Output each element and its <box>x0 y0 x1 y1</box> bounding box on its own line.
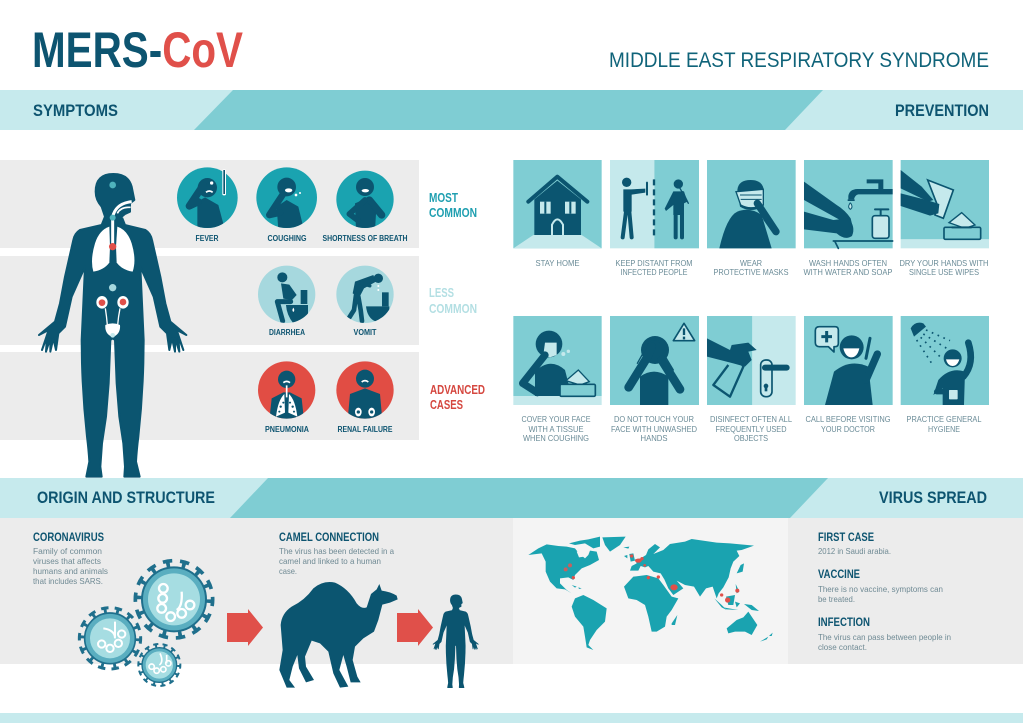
icon: vomit <box>336 266 394 323</box>
text block: vaccine: There is no vaccine, symptoms can <box>818 584 943 594</box>
text block: coronavirus <box>33 530 108 586</box>
prevention: wear masks <box>707 160 796 248</box>
text block: infection: INFECTION <box>818 615 870 629</box>
icon: shortness of breath <box>336 171 394 230</box>
caption: practice hygiene: PRACTICE GENERAL <box>906 414 982 424</box>
caption: cover your face <box>522 414 591 443</box>
text block: coronavirus: that includes SARS. <box>33 576 103 586</box>
arrow: camel to human <box>397 609 433 646</box>
icon: pneumonia <box>258 361 315 420</box>
map: americas <box>528 537 626 650</box>
text block: camel connection: The virus has been detected in a <box>279 546 394 556</box>
caption: practice hygiene <box>906 414 982 434</box>
caption: wear masks: WEAR <box>740 258 762 268</box>
text block: first case <box>818 530 891 556</box>
caption: disinfect objects <box>710 414 792 443</box>
label: shortness of breath: SHORTNESS OF BREATH <box>322 233 408 243</box>
text block: vaccine: be treated. <box>818 594 855 604</box>
panel: lower section backgrounds <box>0 518 1023 664</box>
caption: call doctor <box>806 414 890 434</box>
text block: coronavirus: Family of common <box>33 546 102 556</box>
caption: wear masks: PROTECTIVE MASKS <box>714 267 789 277</box>
header band: symptoms and prevention <box>0 90 1023 130</box>
icon: diarrhea <box>258 266 315 323</box>
caption: call doctor: YOUR DOCTOR <box>821 424 875 434</box>
label: renal failure: RENAL FAILURE <box>338 424 393 434</box>
caption: dry hands <box>900 258 988 277</box>
text block: vaccine: VACCINE <box>818 567 860 581</box>
heading: virus spread: VIRUS SPREAD <box>879 488 987 507</box>
text block: camel connection: camel and linked to a human <box>279 556 381 566</box>
icon: renal failure <box>336 361 394 420</box>
caption: do not touch face: FACE WITH UNWASHED <box>611 424 697 434</box>
row label: less common second line: COMMON <box>429 302 477 316</box>
prevention: practice hygiene <box>901 316 989 405</box>
caption: do not touch face: DO NOT TOUCH YOUR <box>614 414 694 424</box>
kidneys and bladder <box>96 296 129 338</box>
text block: infection <box>818 615 951 652</box>
row label: less common: LESS <box>429 286 454 300</box>
text block: camel connection: CAMEL CONNECTION <box>279 530 379 544</box>
prevention: stay home <box>513 160 602 248</box>
caption: disinfect objects: FREQUENTLY USED <box>716 424 786 434</box>
prevention: wash hands <box>804 160 893 248</box>
icon: coronavirus particles <box>79 561 213 686</box>
caption: wear masks <box>714 258 789 277</box>
map: europe, asia, africa, australia <box>623 539 773 642</box>
header band: origin and virus spread <box>0 478 1023 518</box>
row label: advanced cases second line: CASES <box>430 398 463 412</box>
text block: first case: FIRST CASE <box>818 530 874 544</box>
icon: small human <box>433 595 478 688</box>
caption: stay home: STAY HOME <box>536 258 580 268</box>
prevention: keep distant <box>610 160 699 248</box>
caption: disinfect objects: OBJECTS <box>734 433 768 443</box>
text block: coronavirus: viruses that affects <box>33 556 101 566</box>
heading: origin and structure: ORIGIN AND STRUCTURE <box>37 488 215 507</box>
prevention: disinfect objects <box>707 316 796 405</box>
caption: wash hands <box>804 258 893 277</box>
text block: infection: The virus can pass between people in <box>818 632 951 642</box>
caption: cover your face: WHEN COUGHING <box>523 433 589 443</box>
caption: do not touch face: HANDS <box>640 433 668 443</box>
heading: prevention: PREVENTION <box>895 101 989 120</box>
caption: call doctor: CALL BEFORE VISITING <box>806 414 890 424</box>
caption: do not touch face <box>611 414 697 443</box>
arrow: virus to camel <box>227 609 263 646</box>
human body with affected organs <box>39 174 186 477</box>
footer strip <box>0 713 1023 723</box>
text block: coronavirus: CORONAVIRUS <box>33 530 104 544</box>
caption: disinfect objects: DISINFECT OFTEN ALL <box>710 414 792 424</box>
heading: symptoms: SYMPTOMS <box>33 101 118 120</box>
caption: wash hands: WASH HANDS OFTEN <box>809 258 887 268</box>
world map <box>528 537 773 650</box>
caption: dry hands: SINGLE USE WIPES <box>909 267 979 277</box>
label: vomit: VOMIT <box>354 327 377 337</box>
prevention: do not touch face <box>610 316 699 405</box>
panel: symptom rows <box>0 160 419 440</box>
row label: most common: MOST <box>429 191 458 205</box>
label: fever: FEVER <box>196 233 219 243</box>
prevention: dry hands <box>901 160 989 248</box>
text block: infection: close contact. <box>818 642 867 652</box>
small virus <box>138 644 180 686</box>
caption: wash hands: WITH WATER AND SOAP <box>804 267 893 277</box>
prevention: cover your face <box>513 316 602 405</box>
medium virus <box>79 608 141 669</box>
prevention: call doctor <box>804 316 893 405</box>
label: diarrhea: DIARRHEA <box>269 327 305 337</box>
icon: camel <box>279 582 398 688</box>
caption: cover your face: WITH A TISSUE <box>528 424 584 434</box>
text block: camel connection: case. <box>279 566 297 576</box>
label: coughing: COUGHING <box>268 233 307 243</box>
lungs and airway <box>92 182 134 291</box>
icon: coughing <box>256 167 317 230</box>
text block: coronavirus: humans and animals <box>33 566 108 576</box>
label: pneumonia: PNEUMONIA <box>265 424 309 434</box>
row label: advanced cases: ADVANCED <box>430 383 485 397</box>
row label: most common second line: COMMON <box>429 206 477 220</box>
caption: practice hygiene: HYGIENE <box>928 424 960 434</box>
caption: dry hands: DRY YOUR HANDS WITH <box>900 258 988 268</box>
icon: fever <box>177 167 238 230</box>
large virus <box>135 561 213 638</box>
title: MERS-CoV <box>32 22 244 78</box>
caption: keep distant <box>616 258 693 277</box>
caption: cover your face: COVER YOUR FACE <box>522 414 591 424</box>
caption: keep distant: KEEP DISTANT FROM <box>616 258 693 268</box>
subtitle: MIDDLE EAST RESPIRATORY SYNDROME <box>609 49 989 72</box>
text block: first case: 2012 in Saudi arabia. <box>818 546 891 556</box>
text block: vaccine <box>818 567 943 604</box>
text block: camel connection <box>279 530 394 576</box>
caption: keep distant: INFECTED PEOPLE <box>620 267 688 277</box>
